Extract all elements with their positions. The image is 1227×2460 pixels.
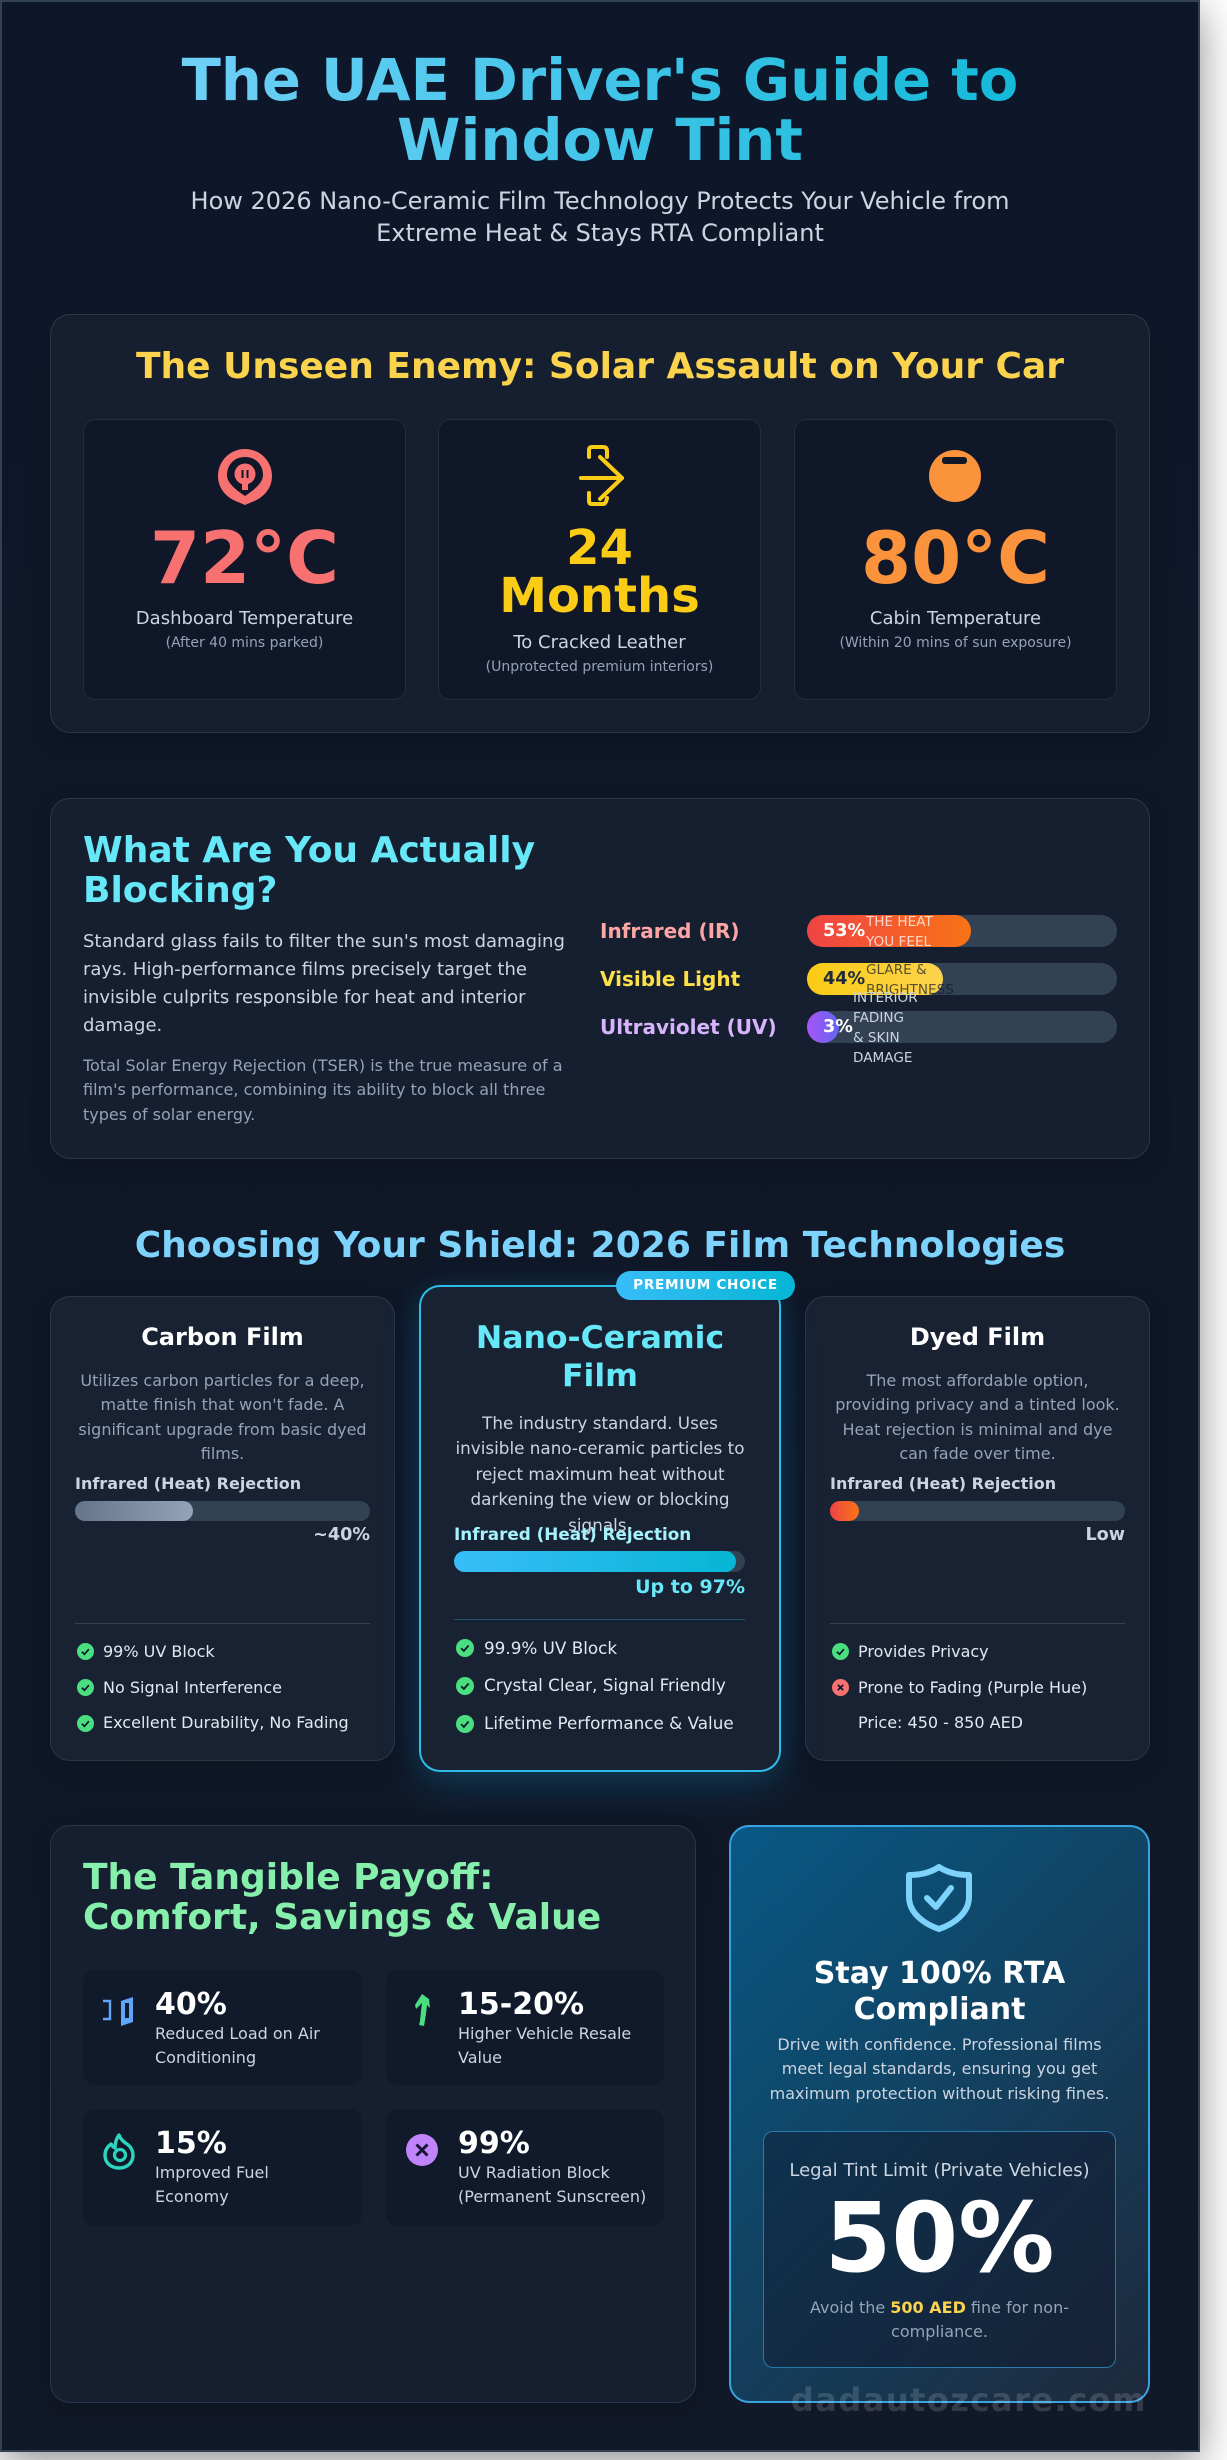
subtitle (191, 187, 1009, 247)
stat card: dashboard temperature (83, 419, 406, 700)
item: price: Price: 450 - 850 AED (858, 1713, 1023, 1732)
text: standard glass: damage. (83, 1015, 162, 1036)
value: 40%: 40% (155, 1987, 227, 2022)
title (50, 51, 1150, 171)
text: carbon description: films. (201, 1444, 244, 1463)
value: up to 97%: Up to 97% (635, 1576, 745, 1598)
text: TSER note: Total Solar Energy Rejection (TSER) is the true measure of a (83, 1056, 563, 1075)
text: nano description: signals. (568, 1515, 632, 1535)
value: 24 months (499, 520, 700, 624)
heading: tangible payoff: Comfort, Savings & Value (83, 1897, 601, 1938)
icon: cross disc (406, 2134, 438, 2166)
text: nano description (456, 1413, 744, 1535)
note: within 20 mins: (Within 20 mins of sun exposure) (839, 635, 1072, 651)
stat card: cabin temperature (794, 419, 1117, 700)
heading: nano-ceramic film: Film (562, 1358, 638, 1394)
badge: premium choice (616, 1271, 795, 1300)
label: infrared: Infrared (IR) (600, 919, 740, 943)
icon: check (456, 1715, 474, 1733)
heading: nano-ceramic film: Nano-Ceramic (476, 1320, 724, 1356)
text: fine note (810, 2298, 1069, 2341)
note: the heat you feel: YOU FEEL (866, 934, 931, 950)
note: interior fading: FADING (853, 1010, 904, 1026)
panel: tangible payoff (50, 1825, 696, 2403)
text: fuel (155, 2163, 269, 2206)
text: reduced load (155, 2024, 320, 2067)
stat card: cracked leather (438, 419, 761, 700)
value: 72°C: 72°C (150, 516, 339, 600)
value: ~40%: ~40% (313, 1525, 370, 1545)
note: glare and brightness: GLARE & (866, 962, 927, 978)
text: drive with confidence: Drive with confidence. Professional films (777, 2035, 1102, 2054)
heading: what are you blocking (83, 830, 535, 911)
text: carbon description: Utilizes carbon particles for a deep, (80, 1371, 365, 1390)
label: IR rejection: Infrared (Heat) Rejection (75, 1474, 301, 1493)
label: cracked leather: To Cracked Leather (513, 632, 686, 653)
value: 99%: 99% (458, 2126, 530, 2161)
text: dyed description: can fade over time. (899, 1444, 1056, 1463)
label: cabin temperature: Cabin Temperature (870, 608, 1041, 629)
icon: flame (103, 2133, 135, 2170)
label: legal tint limit: Legal Tint Limit (Private Vehicles) (789, 2160, 1090, 2181)
text: standard glass: rays. High-performance films precisely target the (83, 959, 527, 980)
label: ultraviolet: Ultraviolet (UV) (600, 1015, 777, 1039)
heading: unseen enemy: The Unseen Enemy: Solar Assault on Your Car (136, 346, 1064, 387)
value: 3%: 3% (823, 1017, 853, 1037)
subtitle: Extreme Heat & Stays RTA Compliant (376, 219, 824, 247)
text: drive with confidence: meet legal standards, ensuring you get (782, 2059, 1097, 2078)
text: dyed description: The most affordable option, (866, 1371, 1088, 1390)
note: interior fading: INTERIOR (853, 990, 918, 1006)
text: carbon description (78, 1371, 367, 1463)
text: TSER note: types of solar energy. (83, 1105, 255, 1124)
bar: infrared 53% (807, 915, 1117, 947)
note: after 40 mins: (After 40 mins parked) (166, 635, 323, 651)
heading: choosing your shield: Choosing Your Shield: 2026 Film Technologies (135, 1225, 1065, 1266)
title: Window Tint (397, 107, 803, 174)
heading: what are you blocking: What Are You Actually (83, 830, 535, 871)
item: uv block: 99.9% UV Block (484, 1638, 617, 1658)
value: 24 months: 24 (566, 520, 633, 576)
icon: check (77, 1679, 94, 1696)
icon: check (832, 1643, 849, 1660)
text: uv (458, 2163, 646, 2206)
title: The UAE Driver's Guide to (182, 47, 1018, 114)
value: 15%: 15% (155, 2126, 227, 2161)
text: dyed description: Heat rejection is minimal and dye (842, 1420, 1112, 1439)
icon: thermometer pin (218, 449, 272, 505)
item: durability: Excellent Durability, No Fading (103, 1713, 349, 1732)
text: drive with confidence (770, 2035, 1109, 2103)
icon: check (456, 1677, 474, 1695)
panel: nano-ceramic film (419, 1285, 781, 1772)
icon: check (456, 1639, 474, 1657)
text: reduced load: Conditioning (155, 2048, 256, 2067)
text: standard glass: invisible culprits responsible for heat and interior (83, 987, 526, 1008)
text: carbon description: matte finish that won't fade. A (100, 1395, 344, 1414)
item: no signal interference: No Signal Interference (103, 1678, 282, 1697)
text: carbon description: significant upgrade from basic dyed (78, 1420, 367, 1439)
text: fuel: Improved Fuel (155, 2163, 269, 2182)
icon: cross (832, 1679, 849, 1696)
bar: dyed low (830, 1501, 1125, 1521)
icon: window (103, 1997, 133, 2026)
value: 53%: 53% (823, 921, 865, 941)
tile: fuel economy (83, 2109, 362, 2226)
text: standard glass: Standard glass fails to filter the sun's most damaging (83, 931, 565, 952)
heading: stay compliant: Compliant (854, 1992, 1025, 2027)
text: dyed description: providing privacy and a tinted look. (835, 1395, 1120, 1414)
panel: dyed film (805, 1296, 1150, 1761)
value: 15-20%: 15-20% (458, 1987, 584, 2022)
heading: stay compliant: Stay 100% RTA (814, 1956, 1065, 1991)
label: visible light: Visible Light (600, 967, 740, 991)
value: 50%: 50% (825, 2182, 1054, 2294)
badge: premium choice: PREMIUM CHOICE (633, 1277, 778, 1293)
tile: resale value (386, 1970, 664, 2085)
label: IR rejection: Infrared (Heat) Rejection (830, 1474, 1056, 1493)
heading: dyed film: Dyed Film (910, 1323, 1045, 1351)
note: interior fading (853, 990, 918, 1066)
text: fuel: Economy (155, 2187, 229, 2206)
text: TSER note (82, 1056, 563, 1124)
panel: what are you blocking (50, 798, 1150, 1159)
note: unprotected interiors: (Unprotected premium interiors) (486, 659, 713, 675)
tile: reduced AC load (83, 1970, 362, 2085)
note: the heat you feel: THE HEAT (866, 914, 933, 930)
text: TSER note: film's performance, combining its ability to block all three (83, 1080, 545, 1099)
note: glare and brightness (866, 962, 954, 998)
bar: nano 97% (454, 1551, 745, 1572)
panel: solar assault (50, 314, 1150, 733)
text: resale (458, 2024, 631, 2067)
text: nano description: darkening the view or blocking (470, 1489, 730, 1509)
icon: check (77, 1715, 94, 1732)
text: nano description: The industry standard. Uses (482, 1413, 718, 1433)
panel: RTA compliance (729, 1825, 1150, 2403)
text: nano description: reject maximum heat without (475, 1464, 725, 1484)
heading: tangible payoff: The Tangible Payoff: (83, 1857, 494, 1898)
value: 80°C: 80°C (861, 516, 1050, 600)
label: dashboard temperature: Dashboard Temperature (136, 608, 353, 629)
panel: carbon film (50, 1296, 395, 1761)
text: drive with confidence: maximum protection without risking fines. (770, 2084, 1109, 2103)
note: the heat you feel (866, 914, 933, 950)
text: resale: Higher Vehicle Resale (458, 2024, 631, 2043)
item: crystal clear: Crystal Clear, Signal Friendly (484, 1675, 726, 1695)
value: 44%: 44% (823, 969, 865, 989)
icon: check (77, 1643, 94, 1660)
value: 24 months: Months (499, 568, 700, 624)
value: low: Low (1085, 1525, 1125, 1545)
text: reduced load: Reduced Load on Air (155, 2024, 320, 2043)
heading: tangible payoff (83, 1857, 601, 1938)
text: nano description: invisible nano-ceramic particles to (456, 1438, 744, 1458)
item: privacy: Provides Privacy (858, 1642, 989, 1661)
icon: up arrow (415, 1994, 430, 2026)
callout: legal limit (763, 2131, 1116, 2368)
text: fine note: compliance. (891, 2322, 988, 2341)
bar: visible 44% (807, 963, 1117, 995)
icon: arrow (579, 445, 624, 506)
subtitle: How 2026 Nano-Ceramic Film Technology Protects Your Vehicle from (191, 187, 1009, 215)
note: interior fading: DAMAGE (853, 1050, 912, 1066)
watermark: dadautozcare.com (791, 2381, 1147, 2419)
item: fading: Prone to Fading (Purple Hue) (858, 1678, 1087, 1697)
label: IR rejection: Infrared (Heat) Rejection (454, 1524, 691, 1544)
note: glare and brightness: BRIGHTNESS (866, 982, 954, 998)
heading: carbon film: Carbon Film (141, 1323, 304, 1351)
text: standard glass (83, 931, 565, 1036)
bar: ultraviolet 3% (807, 1011, 1117, 1043)
bar: carbon 40% (75, 1501, 370, 1521)
item: lifetime performance: Lifetime Performance & Value (484, 1713, 734, 1733)
text: uv: (Permanent Sunscreen) (458, 2187, 646, 2206)
heading: what are you blocking: Blocking? (83, 870, 277, 911)
icon: shield check (906, 1864, 972, 1932)
text: uv: UV Radiation Block (458, 2163, 610, 2182)
text: dyed description (835, 1371, 1120, 1463)
heading: nano-ceramic film (476, 1320, 724, 1394)
tile: uv block (386, 2109, 664, 2226)
text: resale: Value (458, 2048, 502, 2067)
icon: sun disc (929, 450, 981, 502)
item: uv block: 99% UV Block (103, 1642, 215, 1661)
heading: stay compliant (814, 1956, 1065, 2027)
text: fine note: Avoid the 500 AED fine for non- (810, 2298, 1069, 2317)
note: interior fading: & SKIN (853, 1030, 900, 1046)
